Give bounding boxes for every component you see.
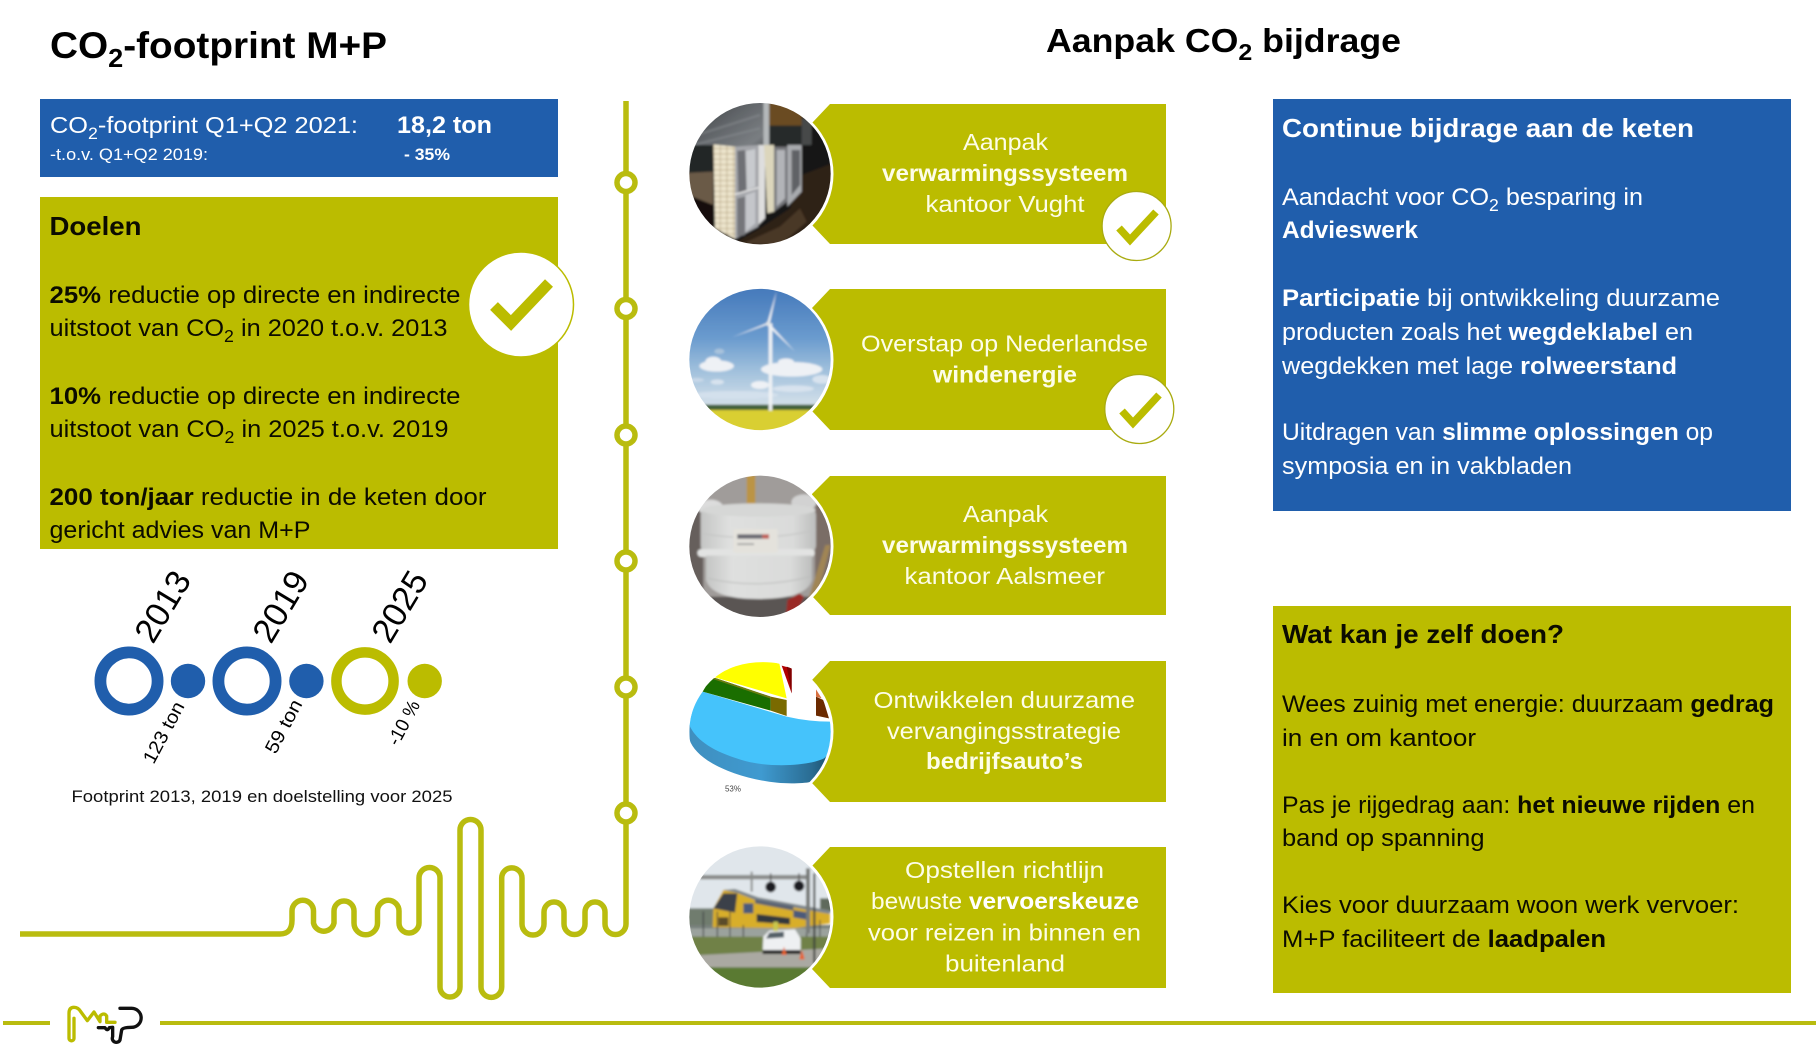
footprint label: CO <box>50 112 85 138</box>
heading: Wat kan je zelf doen? <box>1282 619 1564 649</box>
heading: doelen: Doelen <box>50 211 142 241</box>
text: woon werk: Kies voor duurzaam woon werk vervoer: <box>1282 892 1739 919</box>
text: advieswerk: Advieswerk <box>1282 217 1418 244</box>
banner 2: windenergie <box>680 280 1174 444</box>
banner 5: vervoerskeuze <box>680 840 1166 991</box>
goal: 200 ton: 200 ton/jaar reductie in de keten door <box>50 484 486 511</box>
icon: large check badge <box>468 252 574 357</box>
panel: continue bijdrage <box>1273 99 1791 511</box>
ring 2019 <box>218 652 276 710</box>
text: voor reizen: voor reizen in binnen en <box>868 920 1141 946</box>
banner 1: verwarmingssysteem Vught <box>680 95 1171 260</box>
text: band op spanning: band op spanning <box>1282 825 1484 852</box>
timeline nodes <box>617 174 635 822</box>
dot 2013 <box>171 664 205 698</box>
text: verwarmingssysteem: verwarmingssysteem <box>882 532 1128 558</box>
value 59 ton: 59 ton <box>261 696 307 757</box>
footprint value: 18,2 ton <box>397 112 492 139</box>
goal: 10 percent line 2: uitstoot van CO <box>50 416 218 443</box>
year 2013: 2013 <box>127 564 199 649</box>
text: kantoor Aalsmeer: kantoor Aalsmeer <box>904 563 1105 589</box>
text: Opstellen richtlijn: Opstellen richtlijn <box>905 857 1104 883</box>
logo: M+P <box>69 1007 141 1042</box>
text: windenergie: windenergie <box>932 362 1077 388</box>
chart caption: Footprint 2013, 2019 en doelstelling voor 2025 <box>72 787 452 806</box>
title: Aanpak CO2 bijdrage: Aanpak CO <box>1046 22 1224 59</box>
ring 2025 <box>336 652 394 710</box>
text: wees zuinig: Wees zuinig met energie: duurzaam gedrag <box>1282 691 1774 718</box>
chart: footprint circles <box>100 564 442 767</box>
title: CO2-footprint M+P: 2 <box>108 45 123 73</box>
photo: heat pump units <box>689 103 831 244</box>
panel: wat kan je zelf doen <box>1273 606 1791 993</box>
value -10 %: -10 % <box>384 697 425 749</box>
icon: check badge <box>1102 192 1171 260</box>
text: in en om kantoor: in en om kantoor <box>1282 725 1476 752</box>
title: CO2-footprint M+P: CO <box>50 25 106 66</box>
text: kantoor Vught: kantoor Vught <box>926 191 1085 217</box>
text: bedrijfsauto's: bedrijfsauto’s <box>926 748 1083 774</box>
text: aandacht: Aandacht voor CO <box>1282 184 1484 211</box>
goal: 10 percent line 2: 2 <box>224 427 234 447</box>
photo: gas meter <box>689 476 831 617</box>
title: Aanpak CO2 bijdrage: bijdrage <box>1252 22 1401 59</box>
text: rijgedrag: Pas je rijgedrag aan: het nieuwe rijden en <box>1282 792 1755 819</box>
text: aandacht: 2 <box>1489 195 1499 215</box>
text: Overstap: Overstap op Nederlandse <box>861 330 1148 356</box>
text: buitenland: buitenland <box>945 950 1065 976</box>
text: wegdekken: wegdekken met lage rolweerstand <box>1281 353 1677 380</box>
timeline wave line <box>20 101 626 997</box>
footprint label: 2 <box>88 125 98 143</box>
year 2019: 2019 <box>245 564 317 649</box>
text: Aanpak: Aanpak <box>963 129 1049 155</box>
goal: 25 percent line 2: uitstoot van CO <box>50 315 218 342</box>
text: Ontwikkelen: Ontwikkelen duurzame <box>874 687 1135 713</box>
year 2025: 2025 <box>364 564 436 649</box>
panel: footprint summary <box>40 99 558 177</box>
goal: 200 ton line 2: gericht advies van M+P <box>50 517 310 544</box>
dot 2025 <box>408 664 442 698</box>
text: symposia: symposia en in vakbladen <box>1282 453 1572 480</box>
dot 2019 <box>289 664 324 698</box>
text: uitdragen: Uitdragen van slimme oplossingen op <box>1282 419 1713 446</box>
value 123 ton: 123 ton <box>139 698 189 767</box>
heading: Continue bijdrage aan de keten <box>1282 113 1694 143</box>
footprint label: -footprint Q1+Q2 2021: <box>98 112 358 138</box>
text: producten: producten zoals het wegdeklabel en <box>1282 319 1693 346</box>
text: vervangingsstrategie: vervangingsstrategie <box>887 718 1121 744</box>
footer line <box>3 1021 1816 1025</box>
comparison label: -t.o.v. Q1+Q2 2019: <box>50 145 208 164</box>
title: Aanpak CO2 bijdrage: 2 <box>1238 39 1252 65</box>
text: laadpalen: M+P faciliteert de laadpalen <box>1282 926 1606 953</box>
text: aandacht: besparing in <box>1499 184 1643 211</box>
ring 2013 <box>100 652 158 710</box>
text: verwarmingssysteem: verwarmingssysteem <box>882 160 1128 186</box>
photo: train at crossing <box>689 846 831 988</box>
title: CO2-footprint M+P: -footprint M+P <box>123 25 387 66</box>
goal: 25 percent line 2: 2 <box>224 326 234 346</box>
goal: 25 percent: 25% reductie op directe en indirecte <box>50 282 460 309</box>
text: participatie: Participatie bij ontwikkeling duurzame <box>1282 285 1720 312</box>
goal: 10 percent: 10% reductie op directe en indirecte <box>50 383 460 410</box>
label 53%: 53% <box>725 785 741 794</box>
text: Aanpak: Aanpak <box>963 501 1049 527</box>
comparison value: - 35% <box>404 145 450 164</box>
text: bewuste vervoerskeuze: bewuste vervoerskeuze <box>871 888 1139 914</box>
panel: doelen <box>40 197 558 549</box>
banner 4: bedrijfsauto's <box>686 658 1166 805</box>
icon: check badge <box>1105 374 1174 444</box>
photo: pie chart <box>689 662 833 794</box>
goal: 25 percent line 2: in 2020 t.o.v. 2013 <box>234 315 448 342</box>
goal: 10 percent line 2: in 2025 t.o.v. 2019 <box>234 416 448 443</box>
photo: wind turbine <box>689 288 831 430</box>
banner 3: verwarmingssysteem Aalsmeer <box>689 476 1166 617</box>
